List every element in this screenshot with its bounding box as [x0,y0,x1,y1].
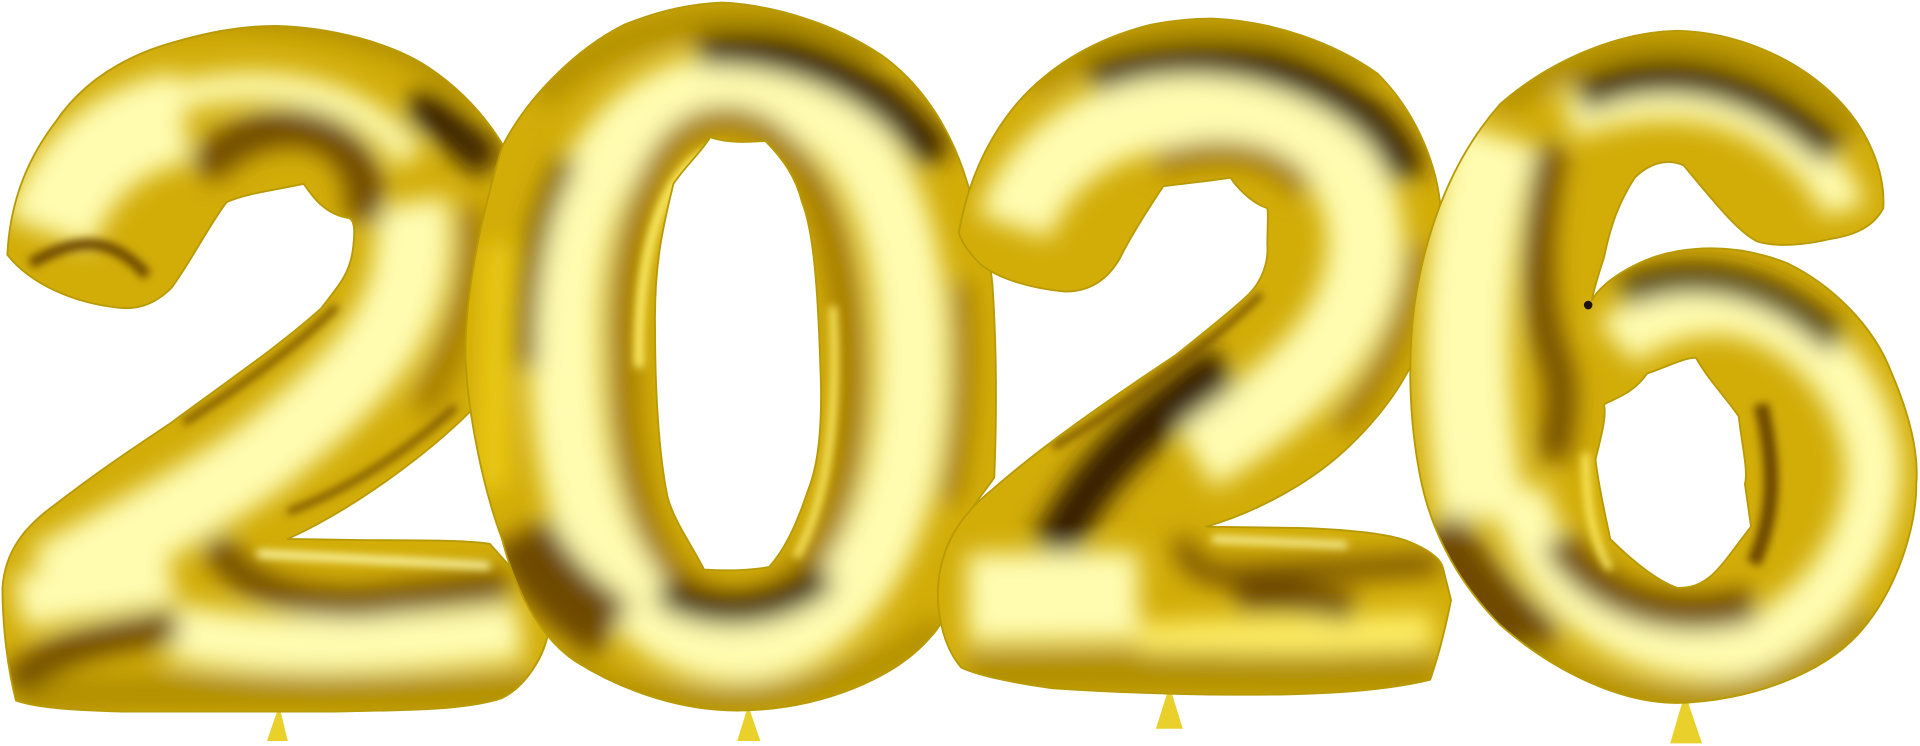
balloon digit: 0 [465,3,996,741]
tassel of second 2 [1156,686,1183,729]
balloon digit: second 2 [938,19,1451,729]
tassel of 6 [1667,693,1702,743]
tassel of first 2 [267,705,289,741]
balloon digit: first 2 [2,14,549,741]
tassel of 0 [737,705,760,741]
balloon digit: 6 [1410,31,1917,743]
